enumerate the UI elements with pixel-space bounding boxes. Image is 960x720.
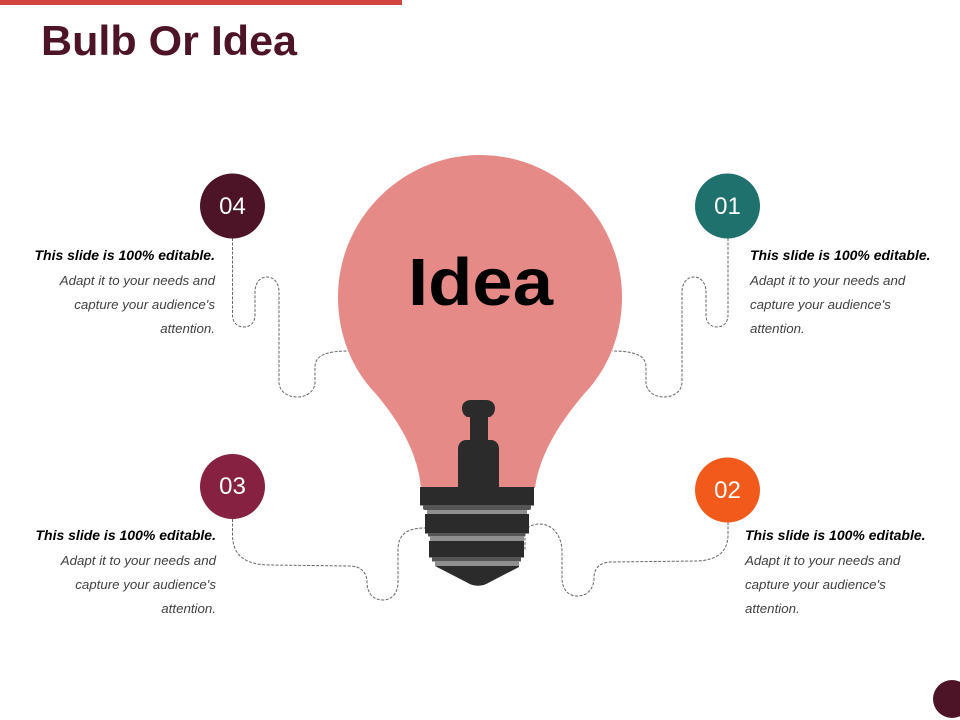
text block 02: attention. (745, 601, 800, 616)
text block 04: capture your audience's (74, 297, 215, 312)
bulb screw base (420, 487, 534, 586)
bulb filament (458, 400, 499, 488)
text block 03: Adapt it to your needs and (60, 553, 217, 568)
marker 03: 03 (219, 473, 246, 500)
text block 01: capture your audience's (750, 297, 891, 312)
footer dot (933, 680, 960, 718)
bulb glass (338, 155, 622, 488)
text block 04: This slide is 100% editable. (34, 247, 215, 263)
marker 02: 02 (714, 477, 741, 504)
text block 03: attention. (161, 601, 216, 616)
text block 02 (744, 527, 926, 616)
connector: 03 to bulb (232, 519, 425, 600)
text block 01 (749, 247, 931, 336)
text block 01: This slide is 100% editable. (750, 247, 931, 263)
marker 02 (695, 458, 760, 522)
text block 04: attention. (160, 321, 215, 336)
lightbulb (338, 155, 622, 586)
text block 01: Adapt it to your needs and (749, 273, 906, 288)
marker 04: 04 (219, 193, 246, 220)
text block 02: Adapt it to your needs and (744, 553, 901, 568)
bulb label: Idea (408, 245, 554, 320)
text block 03 (35, 527, 217, 616)
connector: 02 to bulb (525, 522, 728, 596)
text block 03: capture your audience's (75, 577, 216, 592)
marker 03 (200, 454, 265, 519)
top accent bar (0, 0, 402, 5)
text block 03: This slide is 100% editable. (35, 527, 216, 543)
connector: 04 to bulb (232, 238, 349, 397)
text block 02: capture your audience's (745, 577, 886, 592)
marker 01: 01 (714, 193, 741, 220)
text block 04: Adapt it to your needs and (59, 273, 216, 288)
connector: 01 to bulb (612, 238, 728, 397)
text block 04 (34, 247, 216, 336)
title: Bulb Or Idea (41, 17, 298, 64)
text block 01: attention. (750, 321, 805, 336)
marker 04 (200, 174, 265, 238)
text block 02: This slide is 100% editable. (745, 527, 926, 543)
marker 01 (695, 174, 760, 238)
